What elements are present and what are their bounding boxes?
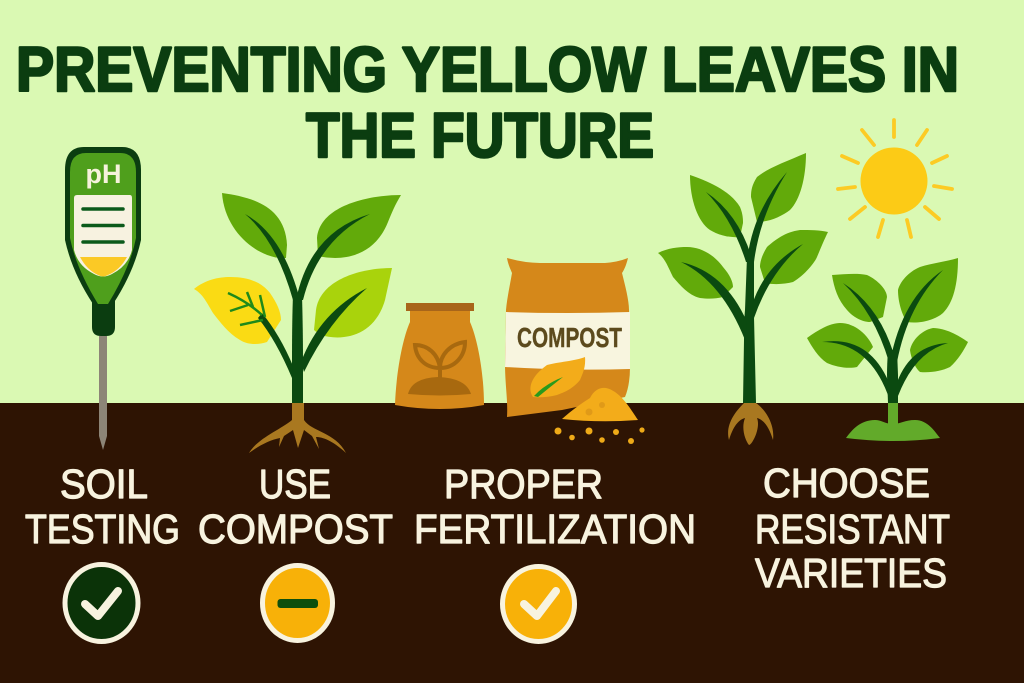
label: soil testing: TESTING xyxy=(25,506,180,552)
icon: compost bag xyxy=(505,258,645,444)
title: THE FUTURE xyxy=(306,101,654,171)
icon: compost bag: COMPOST xyxy=(517,322,622,353)
sky background xyxy=(0,0,1024,404)
icon: pH meter xyxy=(65,147,141,450)
label: use compost xyxy=(198,461,393,552)
label: choose resistant varieties: RESISTANT xyxy=(755,506,950,552)
title xyxy=(16,35,959,171)
label: soil testing xyxy=(25,461,180,552)
icon: green check badge xyxy=(65,564,138,642)
label: use compost: COMPOST xyxy=(198,506,393,552)
icon: pH meter: pH xyxy=(86,159,122,189)
icon: tall plant xyxy=(658,153,828,445)
icon: sun xyxy=(838,120,952,237)
label: choose resistant varieties: VARIETIES xyxy=(755,550,947,596)
label: proper fertilization xyxy=(414,461,696,552)
label: proper fertilization: FERTILIZATION xyxy=(414,506,696,552)
label: soil testing: SOIL xyxy=(60,461,148,507)
icon: yellow check badge xyxy=(502,566,574,642)
icon: small plant xyxy=(807,258,968,441)
labels xyxy=(25,460,950,596)
icon: small fertilizer bag xyxy=(395,303,484,409)
label: proper fertilization: PROPER xyxy=(444,461,603,507)
icon: yellow minus badge xyxy=(262,566,332,640)
label: choose resistant varieties xyxy=(755,460,950,596)
label: use compost: USE xyxy=(259,461,331,507)
label: choose resistant varieties: CHOOSE xyxy=(763,460,930,506)
icon: plant with yellow leaf xyxy=(194,193,401,453)
soil ground xyxy=(0,403,1024,683)
